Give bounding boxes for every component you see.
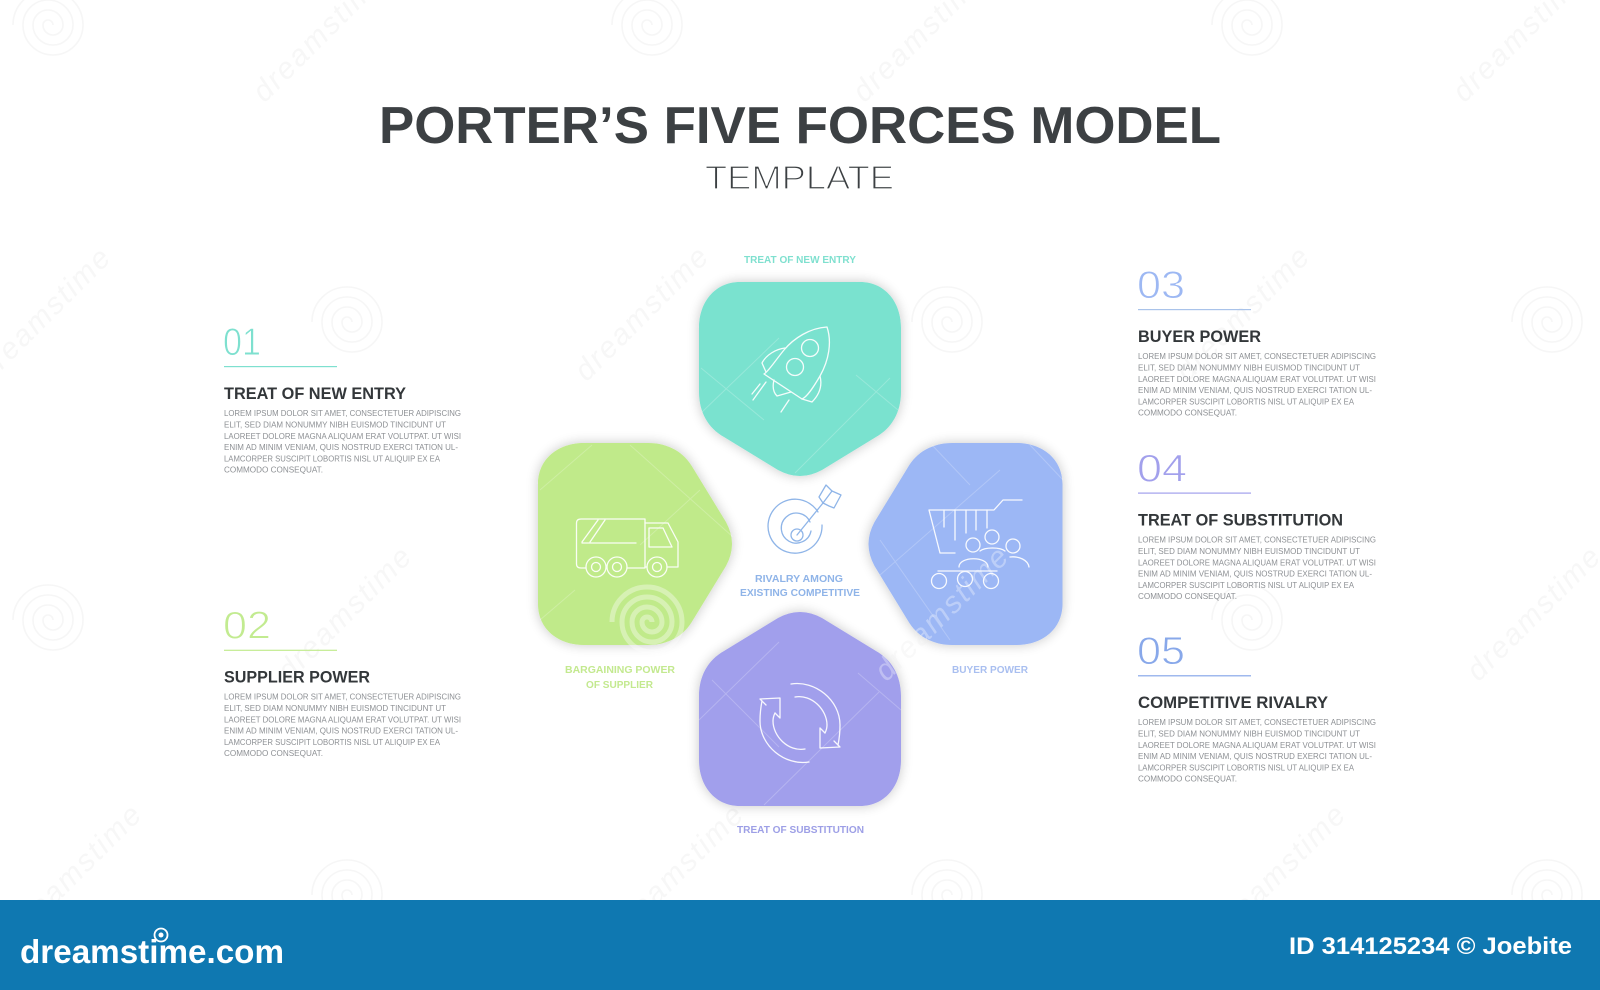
- block 04: treat of substitution: [1137, 448, 1376, 601]
- heading 05: COMPETITIVE RIVALRY: [1138, 694, 1328, 712]
- shape: green supplier: [538, 443, 732, 645]
- body 05: LOREM IPSUM DOLOR SIT AMET, CONSECTETUER ADIPISCING: [1138, 717, 1376, 727]
- block 02: supplier power: [223, 605, 461, 758]
- number 03: 03: [1137, 264, 1185, 307]
- body 02: [224, 692, 461, 758]
- body 02: COMMODO CONSEQUAT.: [224, 748, 323, 758]
- body 04: ELIT, SED DIAM NONUMMY NIBH EUISMOD TINCIDUNT UT: [1138, 546, 1361, 556]
- body 01: LAOREET DOLORE MAGNA ALIQUAM ERAT VOLUTPAT. UT WISI: [224, 431, 461, 441]
- body 05: LAOREET DOLORE MAGNA ALIQUAM ERAT VOLUTPAT. UT WISI: [1138, 740, 1376, 750]
- body 03: COMMODO CONSEQUAT.: [1138, 408, 1237, 418]
- body 01: ENIM AD MINIM VENIAM, QUIS NOSTRUD EXERCI TATION UL-: [224, 442, 458, 452]
- spiral watermark on green: [612, 587, 682, 652]
- block 05: competitive rivalry: [1137, 630, 1376, 784]
- heading 04: TREAT OF SUBSTITUTION: [1138, 512, 1343, 530]
- text watermark on blue: dreamstime: [868, 539, 1016, 687]
- body 04: ENIM AD MINIM VENIAM, QUIS NOSTRUD EXERCI TATION UL-: [1138, 568, 1372, 578]
- label: bargaining power of supplier: BARGAINING POWER: [565, 665, 675, 676]
- icon: rocket: [752, 327, 829, 412]
- body 01: ELIT, SED DIAM NONUMMY NIBH EUISMOD TINCIDUNT UT: [224, 420, 447, 430]
- heading 01: TREAT OF NEW ENTRY: [224, 385, 406, 403]
- watermark layer: dreamstime: [1, 797, 149, 945]
- body 04: LAMCORPER SUSCIPIT LOBORTIS NISL UT ALIQUIP EX EA: [1138, 580, 1354, 590]
- shape overlay: watermark lines: [540, 338, 1063, 805]
- footer band: [0, 900, 1600, 990]
- label: treat of new entry: TREAT OF NEW ENTRY: [744, 255, 856, 266]
- body 01: LOREM IPSUM DOLOR SIT AMET, CONSECTETUER ADIPISCING: [224, 408, 461, 418]
- label: rivalry among existing competitive: [740, 574, 860, 599]
- body 03: LAMCORPER SUSCIPIT LOBORTIS NISL UT ALIQUIP EX EA: [1138, 396, 1354, 406]
- watermark layer: dreamstime: [1169, 239, 1317, 387]
- subtitle: TEMPLATE: [705, 159, 894, 196]
- body 01: [224, 408, 461, 474]
- heading 02: SUPPLIER POWER: [224, 669, 370, 687]
- body 01: COMMODO CONSEQUAT.: [224, 464, 323, 474]
- label: buyer power: BUYER POWER: [952, 665, 1028, 676]
- watermark layer: dreamstime: [271, 539, 419, 687]
- body 02: ENIM AD MINIM VENIAM, QUIS NOSTRUD EXERCI TATION UL-: [224, 726, 458, 736]
- label: bargaining power of supplier: OF SUPPLIER: [586, 680, 653, 691]
- body 03: LAOREET DOLORE MAGNA ALIQUAM ERAT VOLUTPAT. UT WISI: [1138, 374, 1376, 384]
- body 02: LAOREET DOLORE MAGNA ALIQUAM ERAT VOLUTPAT. UT WISI: [224, 714, 461, 724]
- heading 03: BUYER POWER: [1138, 328, 1261, 346]
- icon: target with arrow: [768, 485, 841, 553]
- body 04: LAOREET DOLORE MAGNA ALIQUAM ERAT VOLUTPAT. UT WISI: [1138, 557, 1376, 567]
- body 05: ELIT, SED DIAM NONUMMY NIBH EUISMOD TINCIDUNT UT: [1138, 729, 1361, 739]
- body 02: LAMCORPER SUSCIPIT LOBORTIS NISL UT ALIQUIP EX EA: [224, 737, 440, 747]
- footer logo: dreamstime.com: [20, 933, 284, 970]
- icon: shopping cart with people: [929, 500, 1029, 588]
- number 01: 01: [223, 321, 261, 364]
- body 05: ENIM AD MINIM VENIAM, QUIS NOSTRUD EXERCI TATION UL-: [1138, 751, 1372, 761]
- body 04: LOREM IPSUM DOLOR SIT AMET, CONSECTETUER ADIPISCING: [1138, 534, 1376, 544]
- label: rivalry among existing competitive: RIVALRY AMONG: [755, 574, 843, 585]
- title: PORTER’S FIVE FORCES MODEL: [379, 97, 1221, 155]
- label: bargaining power of supplier: [565, 665, 675, 691]
- body 03: LOREM IPSUM DOLOR SIT AMET, CONSECTETUER ADIPISCING: [1138, 351, 1376, 361]
- icon: recycle arrows: [760, 683, 840, 763]
- number 05: 05: [1137, 630, 1185, 673]
- label: rivalry among existing competitive: EXISTING COMPETITIVE: [740, 588, 860, 599]
- number 02: 02: [223, 605, 271, 648]
- body 05: LAMCORPER SUSCIPIT LOBORTIS NISL UT ALIQUIP EX EA: [1138, 762, 1354, 772]
- number 04: 04: [1137, 448, 1187, 490]
- watermark layer: dreamstime: [1205, 797, 1353, 945]
- watermark layer: dreamstime: [568, 239, 716, 387]
- body 04: COMMODO CONSEQUAT.: [1138, 591, 1237, 601]
- body 04: [1138, 534, 1376, 601]
- footer credit: ID 314125234 © Joebite: [1289, 933, 1572, 960]
- block 01: treat of new entry: [223, 321, 461, 474]
- diagram: five forces: [538, 255, 1063, 836]
- watermark layer: dreamstime: [868, 539, 1016, 687]
- body 02: ELIT, SED DIAM NONUMMY NIBH EUISMOD TINCIDUNT UT: [224, 703, 447, 713]
- body 05: [1138, 717, 1376, 784]
- body 03: ENIM AD MINIM VENIAM, QUIS NOSTRUD EXERCI TATION UL-: [1138, 385, 1372, 395]
- body 02: LOREM IPSUM DOLOR SIT AMET, CONSECTETUER ADIPISCING: [224, 692, 461, 702]
- label: treat of substitution: TREAT OF SUBSTITUTION: [737, 825, 864, 836]
- block 03: buyer power: [1137, 264, 1376, 418]
- shape: purple substitution: [699, 612, 901, 806]
- body 01: LAMCORPER SUSCIPIT LOBORTIS NISL UT ALIQUIP EX EA: [224, 453, 440, 463]
- watermark layer: dreamstime: [603, 797, 751, 945]
- body 03: ELIT, SED DIAM NONUMMY NIBH EUISMOD TINCIDUNT UT: [1138, 362, 1361, 372]
- body 03: [1138, 351, 1376, 418]
- shape: teal new entry: [699, 282, 901, 476]
- body 05: COMMODO CONSEQUAT.: [1138, 774, 1237, 784]
- icon: truck: [576, 519, 678, 577]
- shape: blue buyer: [868, 443, 1062, 645]
